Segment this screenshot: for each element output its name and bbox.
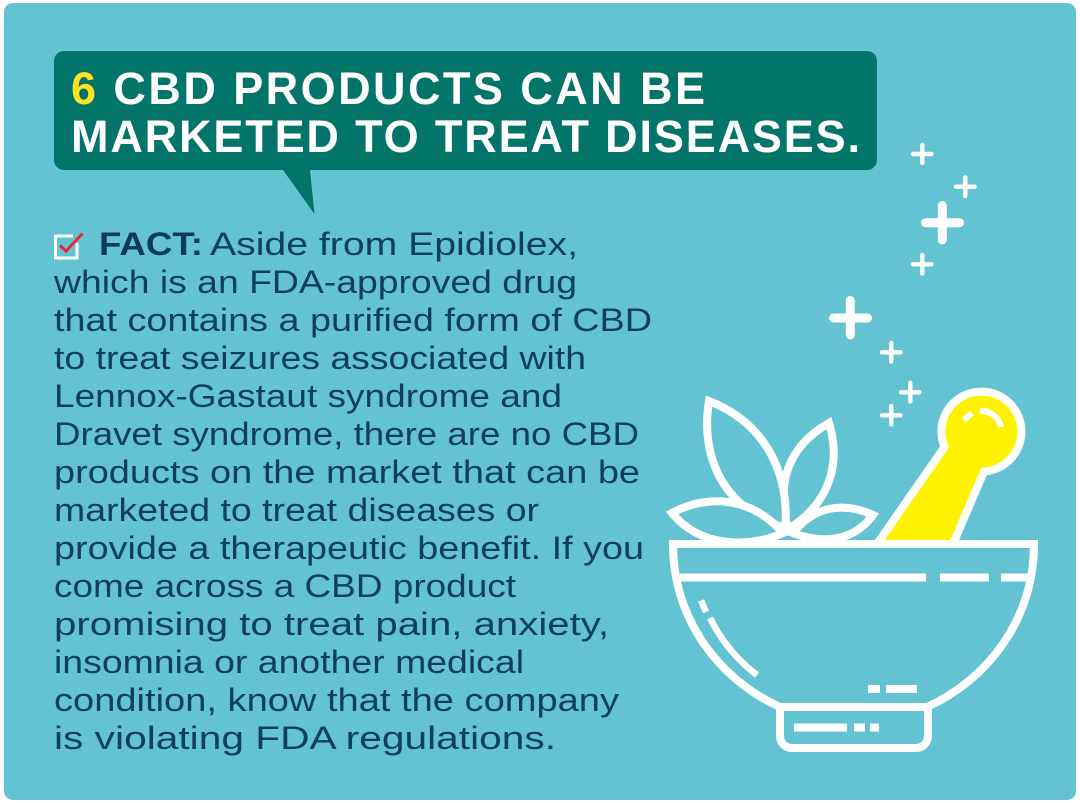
fact text block: promising to treat pain, anxiety,: [54, 606, 609, 642]
bowl highlights: [701, 600, 757, 675]
leaves: [672, 401, 873, 543]
fact text block: marketed to treat diseases or: [54, 492, 539, 528]
title line 2: MARKETED TO TREAT DISEASES.: [71, 111, 860, 162]
fact text block: is violating FDA regulations.: [54, 720, 556, 756]
title speech bubble: [54, 51, 877, 214]
bowl: [673, 544, 1034, 707]
icon: plus signs: [834, 145, 974, 424]
bowl band: [680, 574, 1028, 582]
fact text block: products on the market that can be: [54, 454, 640, 490]
icon: mortar, pestle and leaves: [672, 392, 1034, 748]
icon: checkbox with red check: [56, 234, 82, 258]
fact text block: insomnia or another medical: [54, 644, 524, 680]
fact text block: Aside from Epidiolex,: [210, 226, 578, 262]
fact text block: condition, know that the company: [54, 682, 619, 718]
title line 1: 6 CBD PRODUCTS CAN BE: [71, 63, 705, 114]
fact text block: which is an FDA-approved drug: [53, 264, 577, 300]
fact text block: that contains a purified form of CBD: [54, 302, 652, 338]
fact text block: come across a CBD product: [54, 568, 516, 604]
foot: [780, 708, 928, 748]
pestle: [877, 392, 1021, 544]
fact text block: to treat seizures associated with: [54, 340, 586, 376]
fact text block: Dravet syndrome, there are no CBD: [54, 416, 639, 452]
fact text block: FACT:: [99, 226, 203, 262]
fact text block: provide a therapeutic benefit. If you: [54, 530, 644, 566]
fact text block: [53, 226, 652, 756]
fact text block: Lennox-Gastaut syndrome and: [54, 378, 562, 414]
pestle highlights: [980, 411, 1001, 427]
